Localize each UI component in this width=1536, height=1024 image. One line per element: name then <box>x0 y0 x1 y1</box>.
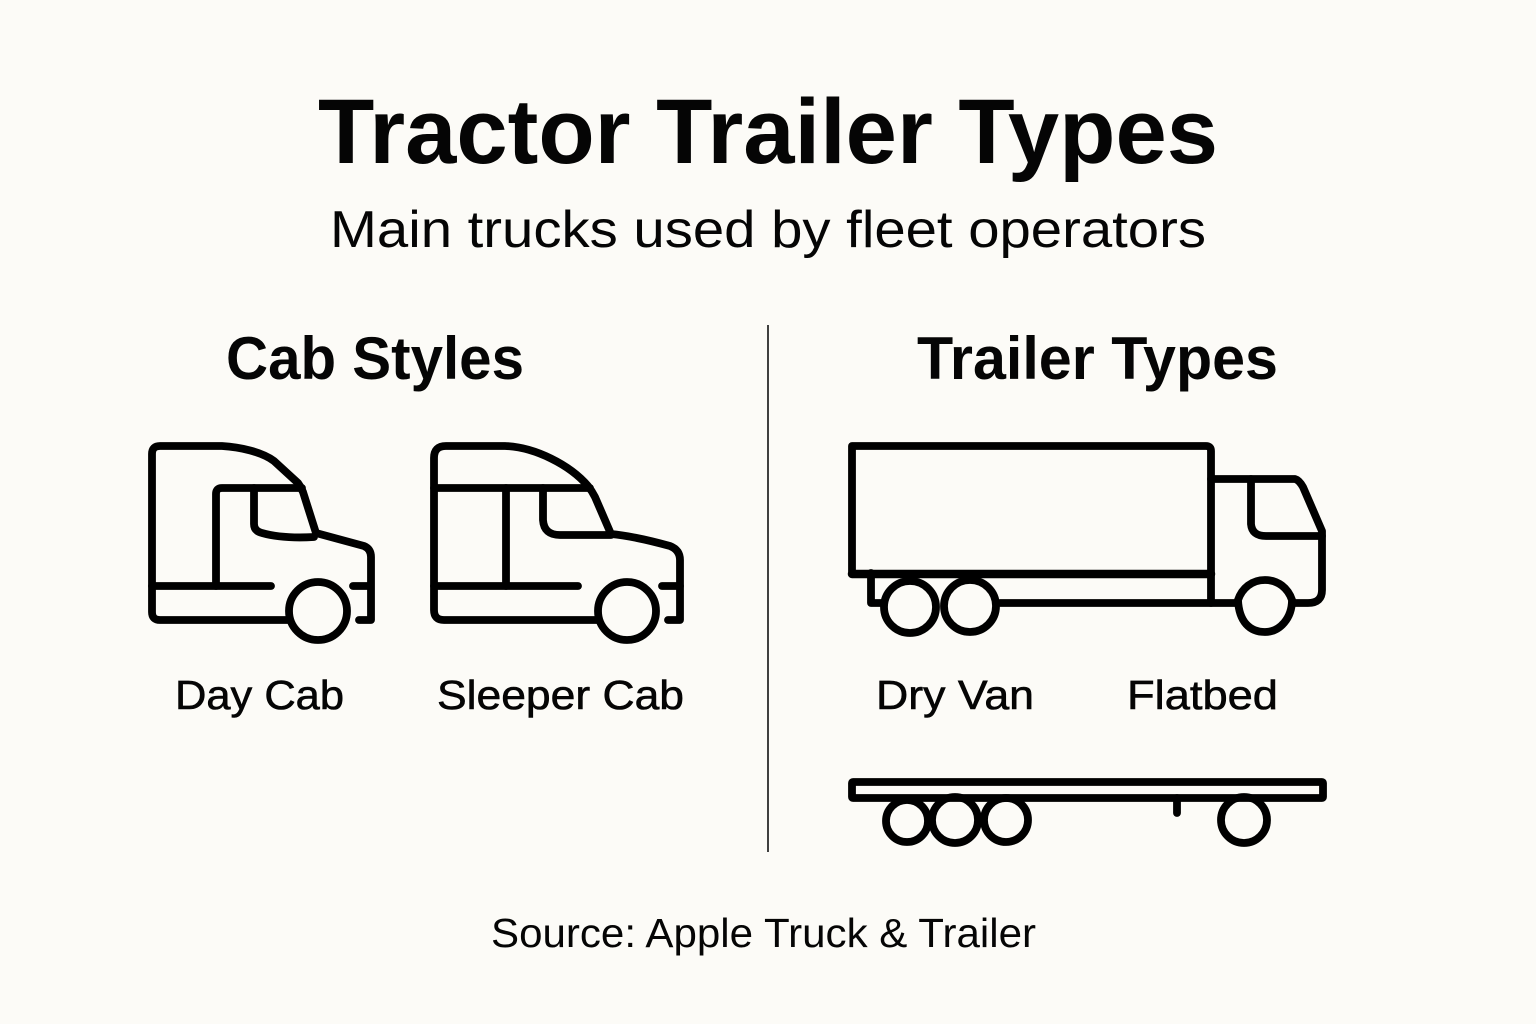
label: Day Cab: Day Cab <box>175 672 344 718</box>
label: Flatbed: Flatbed <box>1127 672 1278 718</box>
heading: Trailer Types: Trailer Types <box>917 325 1278 392</box>
heading: Cab Styles: Cab Styles <box>226 325 524 392</box>
divider between cab styles and trailer types <box>767 325 769 852</box>
title: Tractor Trailer Types <box>318 81 1218 183</box>
icon: day cab truck <box>152 446 371 640</box>
source note: Source: Apple Truck & Trailer <box>491 910 1036 956</box>
icon: sleeper cab truck <box>434 446 680 640</box>
label: Dry Van: Dry Van <box>876 672 1034 718</box>
label: Sleeper Cab: Sleeper Cab <box>437 672 684 718</box>
icon: dry van truck <box>852 446 1322 633</box>
icon: flatbed trailer <box>852 782 1323 843</box>
subtitle: Main trucks used by fleet operators <box>330 201 1206 259</box>
